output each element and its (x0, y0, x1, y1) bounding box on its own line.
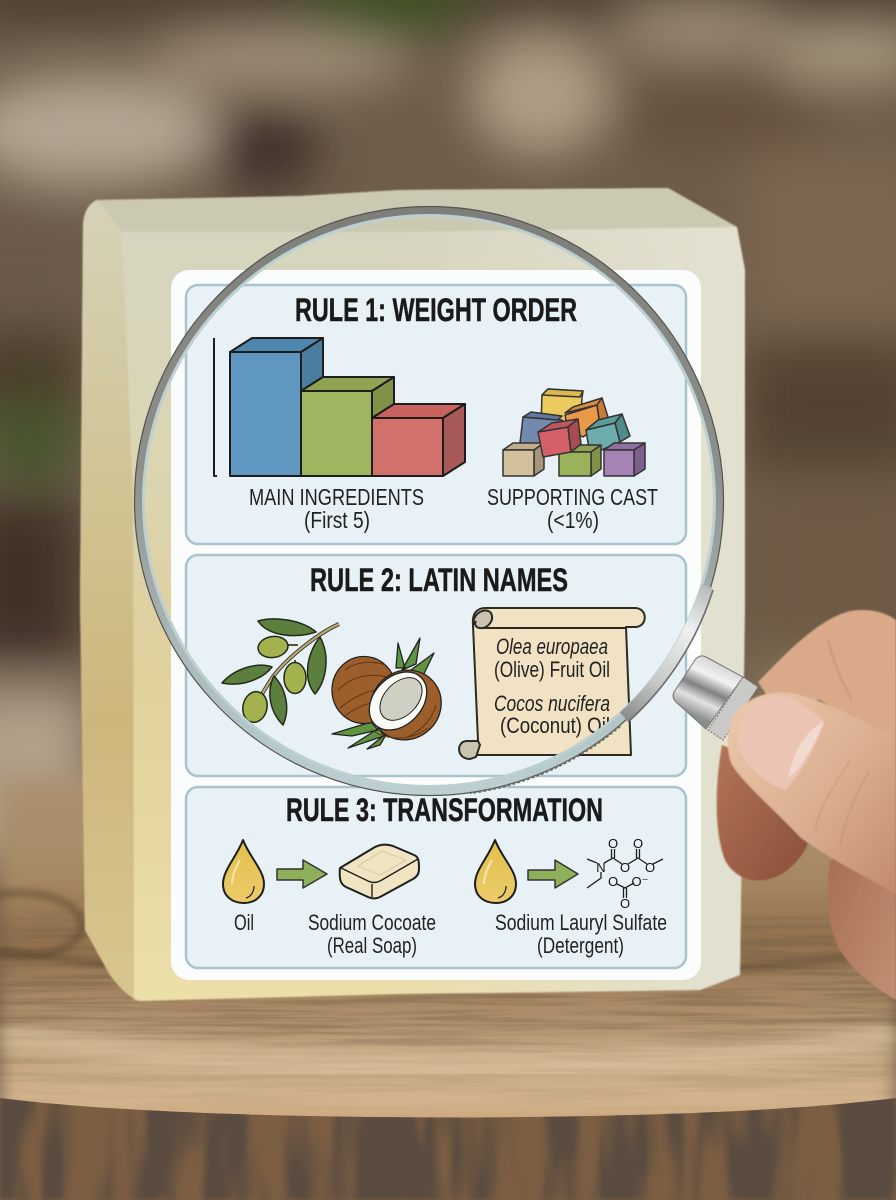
panel: rule 3 transformation (186, 787, 686, 968)
icon: pile of small cubes (503, 389, 645, 476)
molecule atoms: O⁻ (632, 874, 648, 889)
middle finger (717, 745, 810, 881)
label: detergent: (Detergent) (537, 933, 624, 958)
soap top face (97, 188, 737, 232)
latin name: cocos nucifera: Cocos nucifera (494, 691, 610, 716)
bar chart: main ingredients (214, 338, 465, 476)
heading: rule 3: RULE 3: TRANSFORMATION (286, 792, 603, 828)
molecule atoms (596, 836, 655, 911)
panel: rule 2 latin names (186, 555, 686, 776)
text: coconut oil: (Coconut) Oil (500, 713, 610, 738)
panel: rule 1 weight order (186, 285, 686, 544)
molecule atoms: O (608, 874, 618, 889)
molecule atoms: O (608, 836, 618, 851)
label card (171, 270, 701, 980)
label: under 1 percent: (<1%) (547, 507, 599, 533)
icon: coconut (332, 638, 455, 754)
molecule atoms: O (620, 896, 630, 911)
soap right tone (380, 227, 745, 995)
label: sodium cocoate: Sodium Cocoate (308, 910, 436, 935)
molecule atoms: O (633, 836, 643, 851)
label: real soap: (Real Soap) (327, 933, 417, 958)
icon: detergent molecule (587, 836, 663, 911)
tree bark front (0, 1090, 896, 1200)
handle collar (673, 656, 758, 740)
icon: parchment scroll with latin names (459, 608, 645, 759)
thumb (728, 692, 896, 895)
label: supporting cast: SUPPORTING CAST (487, 484, 658, 510)
lens rim (134, 206, 724, 796)
molecule atoms: N (596, 860, 606, 875)
molecule atoms: O (645, 860, 655, 875)
magnifying glass (134, 206, 758, 796)
heading: rule 1: RULE 1: WEIGHT ORDER (295, 292, 577, 328)
knurled grip (708, 677, 758, 740)
label: main ingredients: MAIN INGREDIENTS (249, 484, 424, 510)
label: first 5: (First 5) (304, 507, 370, 533)
thumbnail (738, 696, 824, 789)
arrow: oil to soap (277, 860, 327, 888)
label: oil: Oil (234, 910, 254, 935)
hand holding magnifier (717, 610, 896, 1035)
label: sodium lauryl sulfate: Sodium Lauryl Sulfate (495, 910, 667, 935)
third finger (828, 860, 896, 1035)
soap block (80, 188, 745, 1001)
icon: olive branch (222, 619, 339, 725)
index finger (758, 610, 896, 745)
icon: second oil drop (475, 840, 516, 903)
arrow: oil to detergent (528, 860, 578, 888)
latin name: olea europaea: Olea europaea (496, 634, 608, 659)
text: olive fruit oil: (Olive) Fruit Oil (494, 657, 610, 682)
icon: oil drop (223, 840, 264, 903)
molecule atoms: O (620, 860, 630, 875)
heading: rule 2: RULE 2: LATIN NAMES (310, 562, 568, 598)
soap left edge (80, 200, 140, 1001)
wooden stump top (0, 760, 896, 1140)
icon: soap bar (340, 845, 419, 898)
